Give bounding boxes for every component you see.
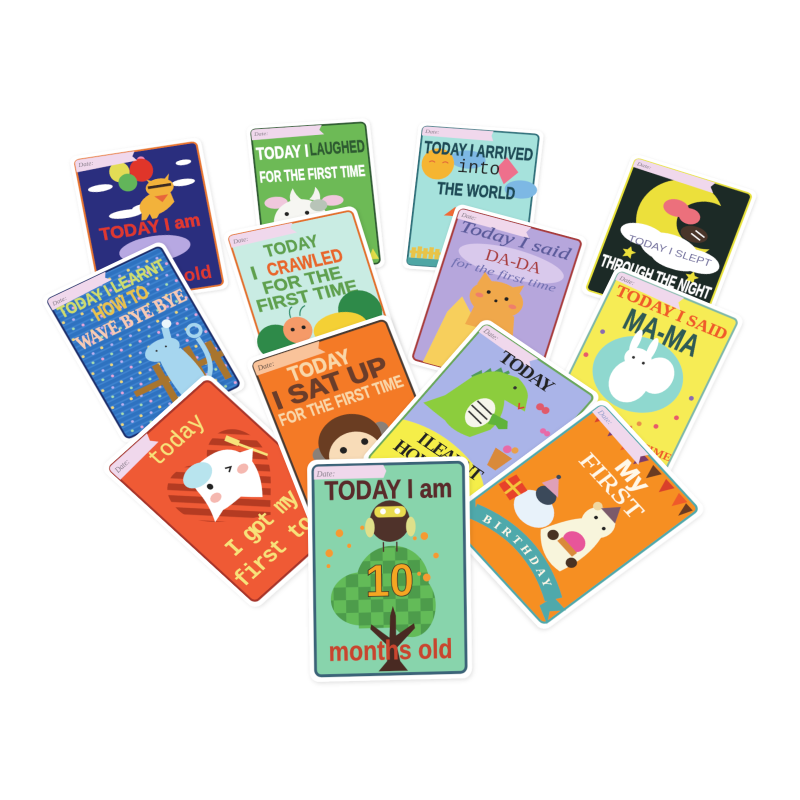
card: today I learnt how to wave bye bye: [40, 240, 247, 445]
date tab: [632, 158, 717, 193]
birthday banner: BIRTHDAY: [482, 514, 552, 586]
owl: [365, 500, 416, 552]
date tab: Date:: [635, 161, 652, 171]
the world: THE WORLD: [436, 178, 516, 203]
polar bear with cake: [528, 485, 635, 576]
gift box: [496, 472, 530, 502]
first time: FOR THE FIRST TIME: [549, 403, 674, 465]
striped heart: [155, 419, 305, 554]
teal circle: [579, 323, 697, 426]
bunting: [589, 409, 694, 519]
card: today I slept through the night: [580, 153, 758, 331]
date tab: [614, 271, 686, 310]
number 10: 10: [365, 556, 414, 607]
date tab: [477, 324, 539, 369]
card: my first birthday: [470, 400, 704, 631]
first time: FIRST TIME: [254, 276, 360, 316]
date tab: Date:: [231, 236, 249, 246]
today I slept: TODAY I SLEPT: [626, 233, 713, 270]
sun: [420, 147, 456, 181]
for the first time: for the first time: [451, 256, 557, 295]
for the first time: FOR THE FIRST TIME: [276, 371, 406, 430]
today: today: [142, 409, 212, 472]
ground: [407, 257, 524, 273]
date tab: [457, 208, 533, 238]
ma-ma: MA-MA: [618, 302, 706, 363]
card: today I am 10 months old: [307, 456, 472, 682]
card: today I crawled for the first time: [222, 205, 406, 394]
butterfly: [523, 402, 564, 438]
heading: TODAY I am: [98, 210, 202, 244]
da-da: DA-DA: [483, 245, 544, 278]
bunny: [601, 327, 688, 416]
blue clouds: [446, 149, 541, 200]
card: today I learnt, dinosaur: [360, 317, 602, 539]
cow: [263, 185, 348, 248]
stars: [618, 244, 702, 285]
card: today I am, cat with balloons: [69, 137, 229, 308]
card: today I got my first tooth: [100, 372, 362, 610]
date tab: [251, 125, 324, 140]
heading: TODAY I: [255, 140, 309, 164]
heading: LAUGHED: [309, 135, 366, 159]
date tab: [314, 465, 386, 480]
today: TODAY: [262, 231, 321, 261]
card: today I arrived into the world: [402, 122, 544, 277]
heading: [255, 135, 366, 164]
orange dots: [325, 524, 439, 584]
card: today I laughed: [246, 118, 385, 275]
into: into: [456, 157, 501, 180]
monkey: [302, 403, 403, 490]
subheading: FOR THE FIRST TIME: [259, 163, 366, 186]
tooth: [172, 429, 285, 531]
tree canopy: [330, 545, 436, 639]
first tooth: first tooth: [229, 486, 347, 593]
sleeping mouse: [654, 196, 718, 246]
today I said: Today I said: [458, 217, 573, 264]
dinosaur: [420, 347, 541, 453]
oval: [454, 235, 568, 292]
heading: TODAY I ARRIVED: [423, 137, 534, 165]
I sat up: I SAT UP: [268, 351, 392, 415]
caterpillar: [276, 293, 372, 356]
blue cat waving: [133, 308, 232, 410]
date tab: Date:: [459, 212, 477, 222]
date tab: Date:: [617, 275, 636, 287]
date tab: [252, 340, 326, 376]
date tab: Date:: [77, 160, 94, 169]
I learnt: I LEARNT: [413, 429, 487, 485]
date tab: [591, 404, 650, 465]
date tab: Date:: [481, 327, 500, 342]
heading: TODAY I am: [324, 472, 452, 506]
birthday banner: [470, 500, 566, 624]
crescent moon: [624, 169, 747, 275]
today I said: TODAY I SAID: [613, 281, 731, 344]
fence corner: [367, 248, 379, 259]
months old: months old: [328, 632, 453, 667]
date tab: [47, 271, 113, 310]
date tab: [108, 432, 161, 480]
my: My: [610, 455, 655, 497]
I got my: I got my: [220, 485, 306, 562]
first: FIRST: [573, 448, 649, 524]
card: today I sat up for the first time: [245, 313, 458, 537]
clouds: [85, 158, 200, 223]
tree trunk: [370, 605, 416, 672]
penguin: [505, 468, 583, 535]
orange cat: [460, 270, 530, 337]
date tab: Date:: [255, 359, 276, 373]
yellow hill: [369, 413, 516, 531]
date tab: Date:: [50, 295, 68, 308]
date tab: [74, 151, 138, 172]
toothbrush: [225, 427, 268, 466]
orange roof: [444, 206, 462, 217]
cloud: [612, 218, 726, 282]
I crawled: [248, 245, 346, 284]
flower pot: [483, 439, 520, 473]
fence: [125, 334, 240, 424]
date tab: Date:: [112, 457, 132, 475]
date tab: Date:: [253, 131, 269, 138]
date tab: Date:: [424, 129, 440, 136]
yellow cat: [423, 292, 552, 390]
date tab: Date:: [595, 407, 615, 426]
wave bye bye: WAVE BYE BYE: [71, 283, 190, 355]
I crawled: CRAWLED: [264, 245, 346, 281]
card: today I said ma-ma: [539, 265, 745, 478]
date tab: [422, 126, 494, 141]
how to: HOW TO: [389, 436, 461, 490]
date tab: Date:: [316, 469, 335, 479]
card: today I said da-da: [406, 203, 588, 397]
balloons: [107, 155, 156, 194]
flower decorations: [561, 327, 707, 446]
kite: [495, 156, 520, 185]
today I learnt: TODAY I LEARNT: [55, 256, 169, 322]
lavender oval: [117, 231, 193, 267]
I crawled: I: [248, 263, 260, 284]
date tab: [228, 222, 297, 248]
for the: FOR THE: [260, 263, 344, 298]
how to: HOW TO: [89, 282, 153, 326]
today: TODAY: [285, 344, 355, 387]
today: TODAY: [494, 347, 559, 398]
fence: [409, 246, 441, 260]
months old: months old: [110, 262, 214, 297]
green bushes: [247, 286, 391, 363]
cat with glasses: [133, 173, 179, 221]
